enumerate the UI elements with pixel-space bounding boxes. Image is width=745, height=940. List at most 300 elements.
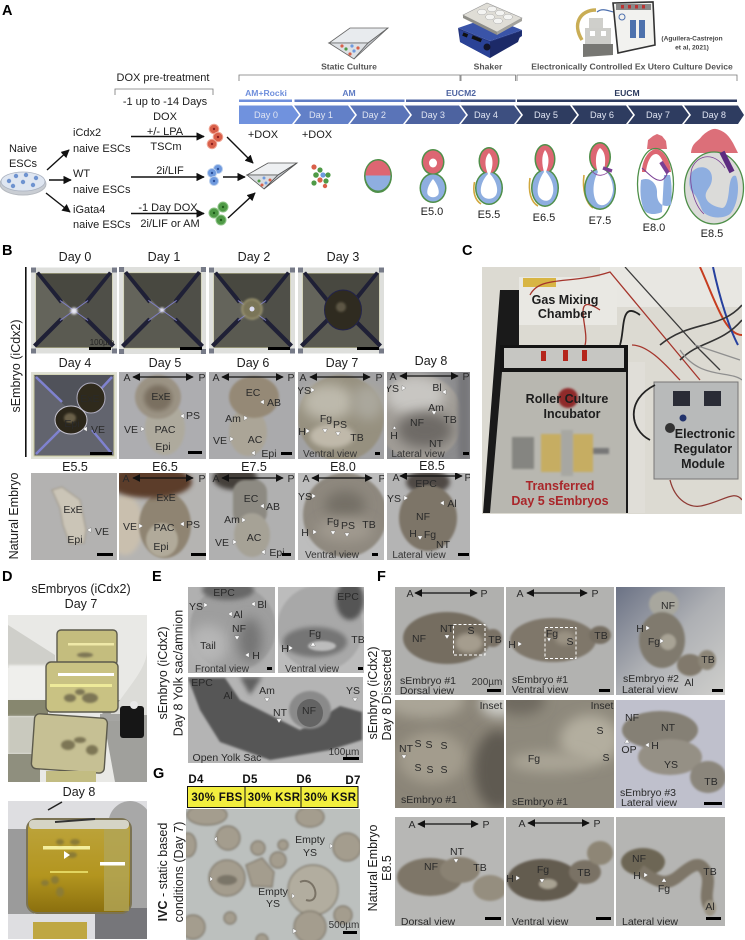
naive ESCs label: ESCs <box>9 158 38 170</box>
icon: pyramid well with cells <box>247 163 297 189</box>
micrograph ventral view: TB <box>351 634 365 646</box>
micrograph natural dorsal: NT <box>450 846 465 858</box>
micrograph E6.5: P <box>198 473 206 485</box>
micrograph sEmbryo 1 dorsal: 200µm <box>472 677 502 688</box>
icon: electronically controlled culture device <box>578 2 655 57</box>
stage titles row 3: E6.5 <box>152 460 178 474</box>
micrograph E8.0: Ventral view <box>305 550 360 561</box>
medium colour bars <box>239 100 737 102</box>
micrograph Day 6 <box>209 372 295 460</box>
panel letter A: A <box>2 3 13 19</box>
cell line labels: naive ESCs <box>73 143 131 155</box>
micrograph inset 1: NT <box>399 743 414 755</box>
day titles row 1: Day 2 <box>238 250 270 264</box>
+DOX labels: +DOX <box>302 129 333 141</box>
micrograph E8.5: NF <box>416 511 430 523</box>
micrograph sEmbryo 2 lateral: Fg <box>648 636 660 648</box>
micrograph E5.5: ExE <box>63 504 83 516</box>
citation: (Aguilera-Castrejon <box>661 36 723 42</box>
Natural Embryo side label: Natural Embryo <box>7 473 21 559</box>
cell line labels: WT <box>73 168 90 180</box>
micrograph open yolk sac: 100µm <box>329 747 359 758</box>
micrograph Day 5: Epi <box>155 441 171 453</box>
micrograph Day 8: Am <box>428 402 444 414</box>
micrograph ventral view: Ventral view <box>285 664 340 675</box>
micrograph open yolk sac <box>188 677 363 764</box>
micrograph natural lateral: Lateral view <box>622 916 678 928</box>
micrograph Day 8: P <box>462 371 470 383</box>
micrograph sEmbryo 3 lateral: NF <box>625 712 639 724</box>
micrograph sEmbryo 3 lateral: OP <box>621 744 637 756</box>
device labels: Module <box>681 457 725 471</box>
day timeline chevrons: Day 6 <box>590 110 614 120</box>
treatment conditions with arrows: 2i/LIF <box>156 165 184 177</box>
micrograph sEmbryo 1 ventral: Fg <box>546 628 558 640</box>
panel letter G: G <box>153 766 164 782</box>
micrograph natural ventral: P <box>593 818 601 830</box>
micrograph E7.5: AB <box>266 501 280 513</box>
micrograph sEmbryo 2 lateral: TB <box>701 654 715 666</box>
micrograph sEmbryo 2 lateral: Lateral view <box>622 684 678 696</box>
device labels: Day 5 sEmbryos <box>511 494 609 508</box>
micrograph frontal view: Bl <box>257 599 267 611</box>
micrograph open yolk sac: Open Yolk Sac <box>193 752 261 764</box>
micrograph sEmbryo 2 lateral: sEmbryo #2 <box>623 673 679 685</box>
embryonic stage labels: E8.5 <box>701 228 723 240</box>
day titles row 2: Day 7 <box>326 356 358 370</box>
micrograph E8.0: YS <box>298 491 312 503</box>
icon: shaker <box>458 3 522 58</box>
micrograph inset 2: Fg <box>528 753 540 765</box>
device labels: Regulator <box>674 442 732 456</box>
stage titles row 3: E8.0 <box>330 460 356 474</box>
micrograph natural dorsal <box>395 817 504 928</box>
treatment conditions with arrows: +/- LPA <box>147 126 184 138</box>
embryonic stage labels: E7.5 <box>589 215 611 227</box>
micrograph sEmbryo 1 ventral: Ventral view <box>512 684 569 696</box>
cell line labels <box>73 127 131 231</box>
micrograph E8.0: P <box>378 473 386 485</box>
sEmbryo side label: sEmbryo (iCdx2) <box>9 319 23 413</box>
micrograph sEmbryo 3 lateral <box>616 700 725 809</box>
embryonic stage labels: E5.5 <box>478 209 500 221</box>
day timeline chevrons: Day 2 <box>362 110 386 120</box>
natural embryo side label: Natural Embryo <box>366 825 380 911</box>
micrograph of IVC embryos <box>186 809 360 940</box>
micrograph inset 1: S <box>414 762 422 774</box>
micrograph E6.5: ExE <box>156 492 176 504</box>
micrograph E7.5: VE <box>215 537 229 549</box>
micrograph frontal view: Frontal view <box>195 664 250 675</box>
micrograph E8.5: H <box>409 528 417 540</box>
micrograph Day 5 <box>119 372 206 459</box>
micrograph frontal view: NF <box>232 623 246 635</box>
day timeline chevrons: Day 3 <box>421 110 445 120</box>
cell line labels: naive ESCs <box>73 184 131 196</box>
embryonic stage labels <box>421 206 723 240</box>
micrograph Day 7: YS <box>297 385 311 397</box>
day titles row 1: Day 3 <box>327 250 359 264</box>
micrograph inset 2: Inset <box>591 700 613 712</box>
micrograph sEmbryo 3 lateral: TB <box>704 776 718 788</box>
micrograph Day 7: A <box>299 372 307 384</box>
micrograph Day 8: H <box>390 430 398 442</box>
micrograph E6.5: PAC <box>154 522 175 534</box>
cell line labels: naive ESCs <box>73 219 131 231</box>
device labels: Incubator <box>544 407 601 421</box>
micrograph natural ventral: TB <box>577 867 591 879</box>
arrows into pyramid well <box>223 137 255 218</box>
day titles row 1: Day 1 <box>148 250 180 264</box>
media condition bar: 30% FBS <box>191 792 243 804</box>
panel D title <box>31 582 131 611</box>
micrograph E8.5: Fg <box>424 529 436 541</box>
micrograph sEmbryo 1 dorsal <box>395 587 504 697</box>
media condition bar <box>188 786 358 808</box>
micrograph E7.5 <box>209 473 295 560</box>
micrograph inset 2: sEmbryo #1 <box>512 796 568 808</box>
panel F: dissected embryos <box>366 569 726 928</box>
micrograph Day 4: VE <box>91 424 105 436</box>
micrograph inset 1: Inset <box>480 700 502 712</box>
E7.5 embryo <box>583 142 616 210</box>
micrograph E7.5: Am <box>224 514 240 526</box>
micrograph inset 1: S <box>414 738 422 750</box>
micrograph frontal view: EPC <box>213 587 235 599</box>
micrograph sEmbryo 1 ventral: TB <box>594 630 608 642</box>
micrograph inset 1: S <box>425 739 433 751</box>
micrograph E6.5: Epi <box>153 541 169 553</box>
embryonic stage labels: E5.0 <box>421 206 443 218</box>
micrograph open yolk sac: NT <box>273 707 288 719</box>
micrograph frontal view: H <box>252 650 260 662</box>
medium labels: AM <box>342 88 356 98</box>
micrograph natural dorsal: Dorsal view <box>401 916 456 928</box>
micrograph Day 1 <box>119 267 206 354</box>
micrograph inset 1 <box>395 700 504 808</box>
day timeline chevrons: Day 1 <box>309 110 333 120</box>
photo: Day 7 bottles <box>8 615 147 782</box>
micrograph E8.5: Al <box>447 498 457 510</box>
micrograph ventral view <box>278 587 365 675</box>
medium labels: AM+Rocki <box>245 88 287 98</box>
media condition bar: 30% KSR <box>248 792 301 804</box>
sEmbryo side label: sEmbryo (iCdx2) <box>366 646 380 740</box>
micrograph natural lateral <box>616 817 725 928</box>
micrograph inset 1: sEmbryo #1 <box>401 794 457 806</box>
naive ESCs label: Naive <box>9 143 37 155</box>
micrograph natural lateral: Al <box>705 901 715 913</box>
micrograph frontal view: Tail <box>200 640 216 652</box>
green cell cluster <box>209 202 228 225</box>
stage titles row 3: E5.5 <box>62 460 88 474</box>
panel D title: sEmbryos (iCdx2) <box>31 582 131 596</box>
stage titles row 3 <box>62 459 445 474</box>
micrograph E7.5: AC <box>247 532 262 544</box>
micrograph frontal view <box>188 587 275 675</box>
day titles row 1 <box>59 250 359 264</box>
panel D: culture roller bottles <box>2 569 152 939</box>
micrograph Day 5: A <box>123 372 131 384</box>
micrograph Day 6: AC <box>248 434 263 446</box>
day titles row 2: Day 8 <box>415 354 447 368</box>
micrograph sEmbryo 1 ventral: A <box>516 588 524 600</box>
micrograph natural ventral: Ventral view <box>512 916 569 928</box>
+DOX labels: +DOX <box>248 129 279 141</box>
culture stage headings: Static Culture <box>321 62 377 72</box>
treatment conditions with arrows: TSCm <box>150 141 182 153</box>
micrograph natural ventral: H <box>506 873 514 885</box>
micrograph E8.0: PS <box>341 520 355 532</box>
micrograph E8.5: EPC <box>415 478 437 490</box>
micrograph Day 6: VE <box>213 435 227 447</box>
micrograph inset 1: S <box>440 740 448 752</box>
micrograph Day 7: PS <box>333 419 347 431</box>
micrograph ventral view: Fg <box>309 628 321 640</box>
micrograph Day 0: 100µm <box>90 338 115 347</box>
micrograph Day 5: VE <box>124 424 138 436</box>
micrograph sEmbryo 1 dorsal: Dorsal view <box>400 685 455 697</box>
medium labels: EUCM2 <box>446 88 476 98</box>
natural embryo side label: E8.5 <box>380 855 394 881</box>
micrograph ventral view: EPC <box>337 591 359 603</box>
panel D title: Day 7 <box>65 597 97 611</box>
micrograph E8.5: A <box>392 472 400 484</box>
micrograph sEmbryo 1 ventral: sEmbryo #1 <box>512 674 568 686</box>
micrograph natural lateral: NF <box>632 853 646 865</box>
micrograph Day 7: TB <box>350 432 364 444</box>
day markers: D5 <box>242 774 258 786</box>
micrograph of IVC embryos: Empty <box>295 834 326 846</box>
treatment conditions with arrows: DOX <box>153 111 178 123</box>
micrograph ventral view: H <box>281 643 289 655</box>
day timeline chevrons: Day 8 <box>702 110 726 120</box>
micrograph E8.0 <box>298 473 386 561</box>
day markers: D7 <box>345 775 361 787</box>
micrograph E5.5 <box>31 473 117 560</box>
panel C: culture device photo <box>462 243 742 514</box>
E6.5 embryo <box>529 144 559 207</box>
side line <box>25 267 27 457</box>
split arrows from dish <box>46 150 71 212</box>
blue cell cluster <box>208 164 222 186</box>
micrograph open yolk sac: Am <box>259 685 275 697</box>
micrograph sEmbryo 1 ventral: S <box>566 636 574 648</box>
micrograph inset 2: S <box>596 725 604 737</box>
day timeline chevrons: Day 0 <box>254 110 278 120</box>
day titles row 1: Day 0 <box>59 250 91 264</box>
micrograph E8.0: A <box>302 473 310 485</box>
micrograph sEmbryo 2 lateral <box>616 587 725 696</box>
culture stage headings: Electronically Controlled Ex Utero Culture Device <box>531 62 733 72</box>
micrograph E8.0: TB <box>362 519 376 531</box>
micrograph Day 4: Epi <box>64 418 80 430</box>
micrograph E6.5 <box>119 473 206 560</box>
micrograph Day 4 <box>31 372 117 459</box>
micrograph Day 7 <box>297 372 384 460</box>
device labels: Roller Culture <box>526 392 608 406</box>
micrograph E8.5: YS <box>387 493 401 505</box>
stage titles row 3: E8.5 <box>419 459 445 473</box>
E5.0 embryo <box>420 149 446 203</box>
panel G: IVC static conditions <box>153 766 361 940</box>
DOX pre-treatment heading and bracket: -1 up to -14 Days <box>123 96 208 108</box>
icon: static culture pyramid <box>329 28 388 59</box>
micrograph E6.5: VE <box>123 521 137 533</box>
micrograph open yolk sac: Al <box>223 690 233 702</box>
micrograph Day 5: PAC <box>155 424 176 436</box>
panel letter E: E <box>152 569 162 585</box>
embryonic stage labels: E8.0 <box>643 222 665 234</box>
micrograph sEmbryo 1 dorsal: TB <box>488 634 502 646</box>
micrograph open yolk sac: EPC <box>191 677 213 689</box>
red cell cluster <box>207 124 223 149</box>
micrograph Day 2 <box>209 268 295 354</box>
micrograph natural lateral: H <box>633 870 641 882</box>
micrograph natural ventral <box>506 817 614 928</box>
micrograph inset 1: S <box>440 764 448 776</box>
micrograph of IVC embryos: YS <box>266 898 280 910</box>
micrograph of IVC embryos: Empty <box>258 886 289 898</box>
micrograph Day 7: H <box>298 426 306 438</box>
DOX pre-treatment heading and bracket: DOX pre-treatment <box>117 72 209 84</box>
micrograph Day 7: P <box>375 372 383 384</box>
micrograph Day 5: PS <box>186 410 200 422</box>
micrograph open yolk sac: YS <box>346 685 360 697</box>
micrograph sEmbryo 1 dorsal: P <box>480 588 488 600</box>
micrograph E8.5: P <box>464 472 472 484</box>
micrograph Day 8: Lateral view <box>391 449 445 460</box>
micrograph E5.5: VE <box>95 526 109 538</box>
embryonic stage labels: E6.5 <box>533 212 555 224</box>
micrograph Day 8 <box>385 371 470 460</box>
treatment conditions with arrows: -1 Day DOX <box>138 202 198 214</box>
panel E: yolk sac and amnion <box>152 569 365 764</box>
panel E side label: sEmbryo (iCdx2) <box>156 626 170 720</box>
micrograph natural dorsal: A <box>408 819 416 831</box>
micrograph E8.0: Fg <box>327 516 339 528</box>
photo of device <box>482 267 742 514</box>
micrograph inset 2: S <box>602 752 610 764</box>
photo: Day 8 bottle <box>8 801 147 939</box>
medium labels <box>245 88 640 98</box>
day 2 embryo <box>364 159 392 193</box>
day 1 cell clump <box>311 164 331 188</box>
micrograph Day 6: Am <box>225 413 241 425</box>
micrograph E7.5: P <box>287 473 295 485</box>
micrograph natural ventral: Fg <box>537 864 549 876</box>
micrograph Day 0 <box>31 268 117 354</box>
panel letter F: F <box>377 569 386 585</box>
sEmbryo side label: Day 8 Dissected <box>380 649 394 741</box>
natural embryo side label <box>366 825 394 911</box>
day timeline chevrons: Day 4 <box>474 110 498 120</box>
panel B: embryo timecourse micrographs <box>2 243 472 561</box>
citation: et al, 2021) <box>675 44 709 52</box>
micrograph sEmbryo 3 lateral: H <box>651 740 659 752</box>
day timeline chevrons: Day 5 <box>534 110 558 120</box>
micrograph frontal view: YS <box>189 601 203 613</box>
culture stage headings: Shaker <box>474 62 503 72</box>
micrograph Day 5: ExE <box>151 391 171 403</box>
micrograph frontal view: Al <box>233 609 243 621</box>
panel G side label: IVC - static based <box>156 823 170 921</box>
cell line labels: iCdx2 <box>73 127 101 139</box>
micrograph E5.5: Epi <box>67 534 83 546</box>
panel A: culture protocol schematic <box>0 2 744 240</box>
micrograph natural dorsal: NF <box>424 861 438 873</box>
micrograph sEmbryo 3 lateral: YS <box>664 759 678 771</box>
day titles row 2 <box>59 354 447 370</box>
day timeline chevrons: Day 7 <box>646 110 670 120</box>
micrograph Day 8: A <box>389 371 397 383</box>
micrograph sEmbryo 3 lateral: Lateral view <box>621 797 677 809</box>
device labels: Electronic <box>675 427 735 441</box>
E8.5 embryo <box>684 129 744 224</box>
device labels: Transferred <box>526 479 594 493</box>
micrograph sEmbryo 2 lateral: NF <box>661 600 675 612</box>
micrograph sEmbryo 1 dorsal: NF <box>412 633 426 645</box>
panel G side label: conditions (Day 7) <box>172 822 186 922</box>
panel letter C: C <box>462 243 473 259</box>
micrograph E8.5: NT <box>436 539 451 551</box>
micrograph Day 5: P <box>198 372 206 384</box>
Day 8 title: Day 8 <box>63 785 95 799</box>
micrograph sEmbryo 3 lateral: NT <box>661 722 676 734</box>
cell line labels: iGata4 <box>73 204 105 216</box>
day timeline chevrons <box>239 106 744 124</box>
micrograph Day 8: NT <box>429 438 444 450</box>
micrograph Day 8: TB <box>443 414 457 426</box>
micrograph Day 4: ExE <box>80 393 100 405</box>
panel E side label <box>156 610 186 736</box>
micrograph Day 6: Epi <box>261 448 277 460</box>
day titles row 2: Day 4 <box>59 356 91 370</box>
micrograph inset 2 <box>506 700 614 808</box>
culture stage headings <box>321 62 733 72</box>
micrograph E8.0: H <box>301 527 309 539</box>
+DOX labels <box>248 129 333 141</box>
stage titles row 3: E7.5 <box>241 460 267 474</box>
micrograph of IVC embryos: YS <box>303 847 317 859</box>
micrograph sEmbryo 2 lateral: H <box>636 623 644 635</box>
device labels <box>511 293 735 508</box>
micrograph of IVC embryos: 500µm <box>329 920 359 931</box>
DOX pre-treatment heading and bracket <box>115 72 213 108</box>
micrograph natural dorsal: TB <box>473 862 487 874</box>
micrograph E6.5: PS <box>186 519 200 531</box>
micrograph sEmbryo 1 ventral: P <box>591 588 599 600</box>
micrograph Day 6: AB <box>267 397 281 409</box>
micrograph sEmbryo 1 ventral: H <box>508 639 516 651</box>
micrograph E7.5: Epi <box>269 547 285 559</box>
micrograph sEmbryo 3 lateral: sEmbryo #3 <box>620 787 676 799</box>
micrograph E7.5: A <box>212 473 220 485</box>
day markers: D6 <box>296 774 312 786</box>
day markers <box>188 774 361 787</box>
panel letter D: D <box>2 569 12 585</box>
media condition bar: 30% KSR <box>304 792 357 804</box>
micrograph sEmbryo 1 dorsal: A <box>406 588 414 600</box>
micrograph inset 1: S <box>426 764 434 776</box>
micrograph Day 3 <box>298 268 384 354</box>
micrograph open yolk sac: NF <box>302 705 316 717</box>
micrograph E7.5: EC <box>244 493 259 505</box>
micrograph sEmbryo 1 dorsal: S <box>467 625 475 637</box>
micrograph natural dorsal: P <box>482 819 490 831</box>
micrograph Day 6: P <box>287 372 295 384</box>
micrograph sEmbryo 2 lateral: Al <box>684 677 694 689</box>
